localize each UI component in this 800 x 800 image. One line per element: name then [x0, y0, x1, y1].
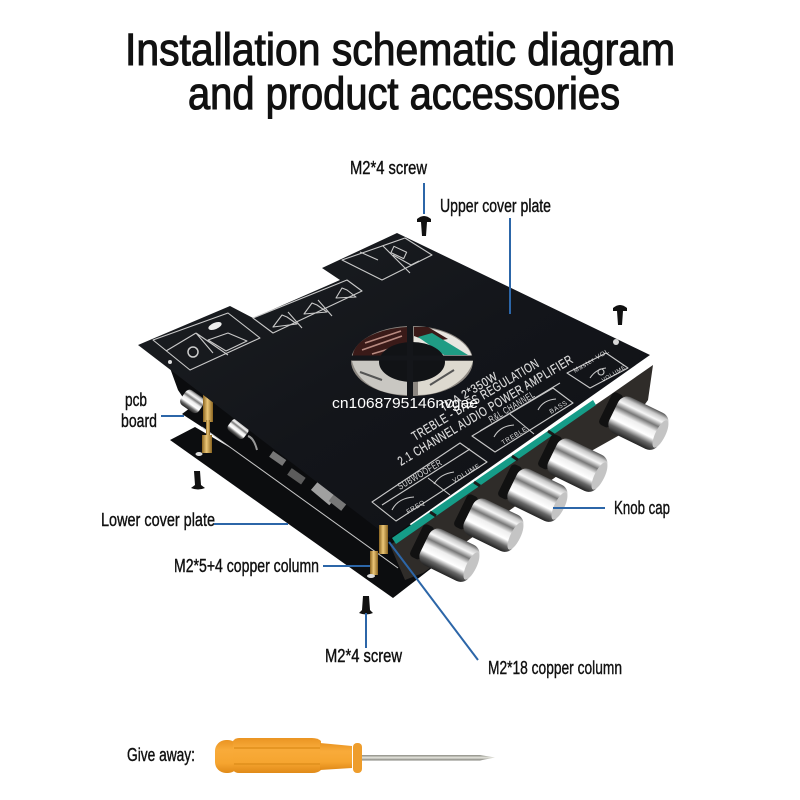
R&L channel control box: BASS [548, 400, 569, 416]
icon: screwdriver [215, 738, 495, 773]
label: M2*18 copper column: M2*18 copper column [488, 658, 622, 678]
label: upper cover plate: Upper cover plate [440, 196, 551, 216]
label: upper cover plate [440, 196, 551, 314]
master volume control box [567, 348, 628, 388]
knob 2 [452, 491, 529, 556]
label: M2*18 copper column [389, 542, 622, 678]
subwoofer control box [372, 443, 487, 521]
label: M2*5+4 copper column: M2*5+4 copper column [174, 556, 319, 576]
master volume control box: Master VOL [572, 348, 611, 375]
screw: top [417, 216, 431, 236]
subwoofer control box: FREQ [405, 499, 427, 516]
title [125, 24, 675, 119]
R&L channel control box: R&L CHANNEL [487, 389, 537, 426]
lower cover plate [170, 427, 433, 598]
title: Installation schematic diagram [125, 24, 675, 75]
label: knob cap: Knob cap [614, 498, 670, 518]
connector box: usb [342, 238, 432, 280]
screw: bottom [359, 596, 373, 614]
watermark: cn1068795146nvgae [332, 395, 478, 412]
knob 3 [496, 461, 573, 526]
label: M2*4 screw top: M2*4 screw [350, 158, 428, 178]
label: M2*4 screw bottom [325, 613, 403, 666]
board printed labels: TREBLE - BASS REGULATION [409, 356, 542, 444]
connector box: audio input [153, 313, 260, 370]
label: M2*4 screw bottom: M2*4 screw [325, 646, 403, 666]
corner brass columns [367, 525, 388, 578]
pcb board [170, 360, 430, 568]
knob 1 [408, 521, 485, 586]
screw: right [613, 305, 627, 325]
R&L channel control box: TREBLE [500, 426, 529, 447]
give away label: Give away: [127, 745, 195, 765]
connector box: speakers [253, 280, 362, 333]
label: knob cap [553, 498, 670, 518]
board printed labels [395, 352, 576, 469]
knob 5 master [597, 389, 674, 454]
title: and product accessories [188, 68, 620, 119]
side bracket [390, 365, 653, 580]
knobs [408, 389, 674, 586]
knob 4 [536, 431, 613, 496]
board printed labels: 2.1 CHANNEL AUDIO POWER AMPLIFIER [395, 352, 576, 469]
label: pcb board: board [121, 411, 157, 431]
label: lower cover plate: Lower cover plate [101, 510, 215, 530]
top cover plate [138, 233, 650, 538]
label: pcb board: pcb [125, 390, 147, 410]
screw: left [191, 471, 205, 490]
cooling hole with internal parts [350, 325, 475, 397]
left brass columns [196, 392, 213, 456]
R&L channel control box [472, 383, 573, 452]
master volume control box: VOLUME [601, 365, 627, 384]
subwoofer control box: VOLUME [451, 463, 482, 485]
subwoofer control box: SUBWOOFER [396, 457, 444, 493]
label: M2*4 screw top [350, 158, 428, 214]
label: pcb board [121, 390, 184, 431]
teal pcb strip [392, 400, 596, 544]
board printed labels: TDA 2*350W [437, 369, 500, 415]
